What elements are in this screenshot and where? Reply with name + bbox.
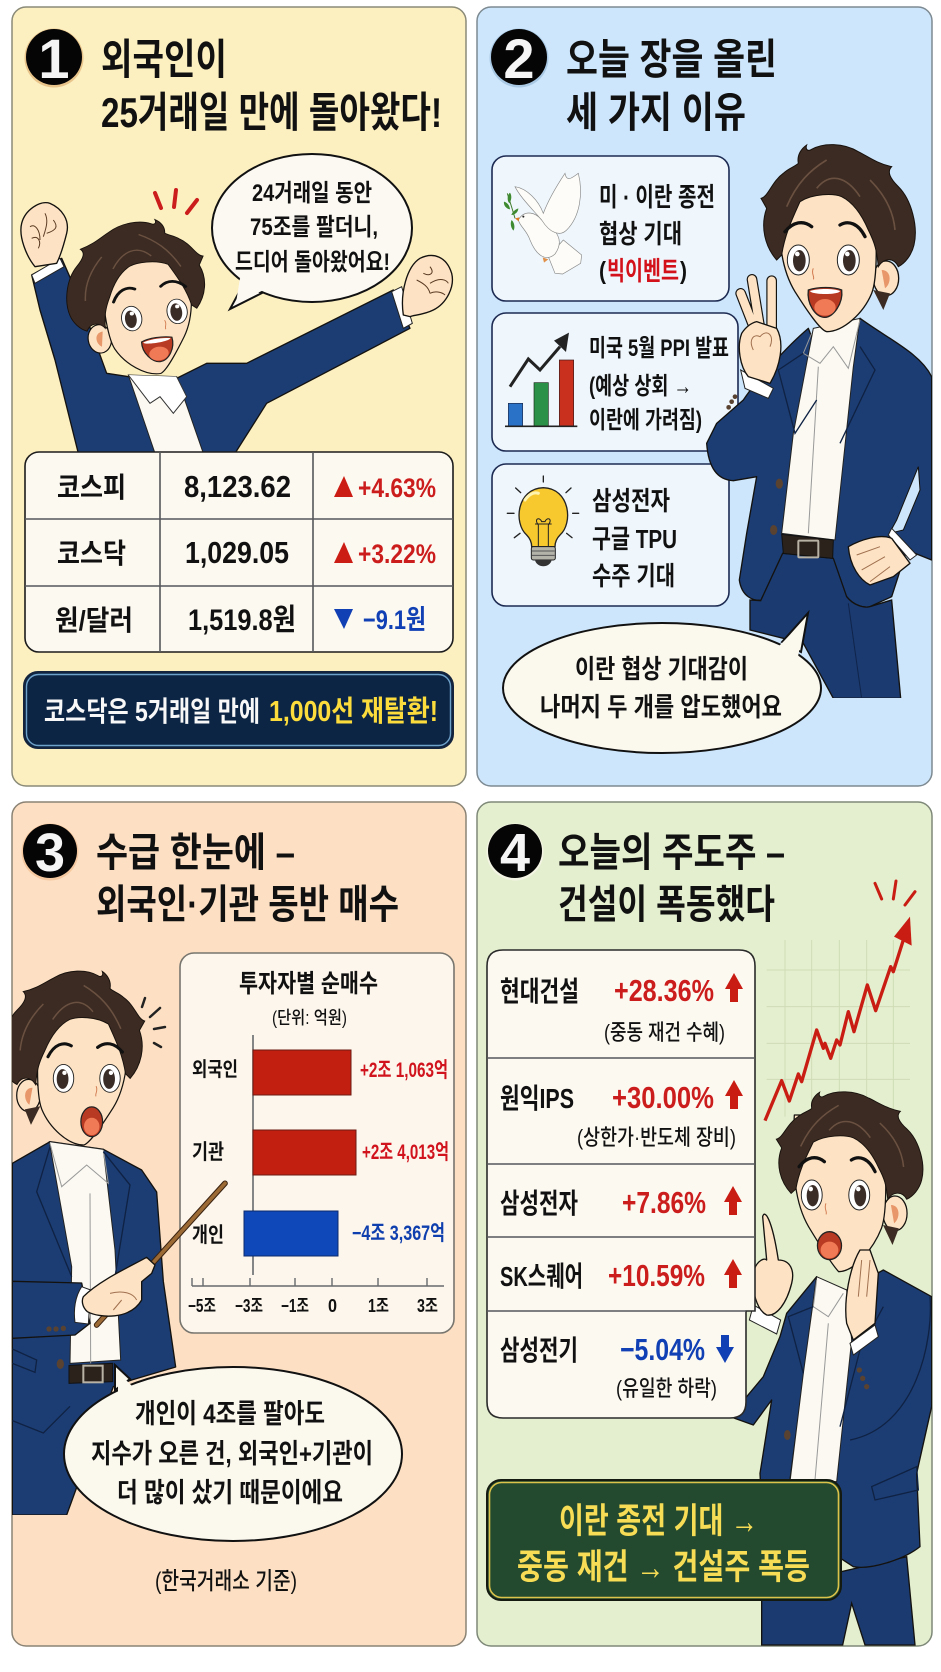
speech bubble 3: 더 많이 샀기 때문이에요 — [117, 1478, 343, 1508]
row: KOSDAQ: 코스닥 — [57, 538, 126, 569]
banner: construction rally — [487, 1480, 841, 1600]
reason box 2: (예상 상회 → — [589, 373, 692, 400]
bar: institutions: +2조 4,013억 — [362, 1141, 449, 1164]
banner: KOSDAQ 1000: 1,000선 재탈환! — [269, 695, 438, 728]
speech bubble 1: 드디어 돌아왔어요! — [235, 249, 390, 276]
title 1: 외국인이 — [101, 36, 227, 83]
reason box 1: 협상 기대 — [599, 219, 682, 249]
title 2 — [566, 36, 777, 136]
speech bubble 3 — [64, 1365, 402, 1541]
badge 1: 1 — [38, 27, 70, 90]
title 3: 수급 한눈에 – — [96, 831, 295, 875]
badge 4 — [486, 823, 544, 883]
icon: bar chart with arrow — [505, 333, 577, 426]
badge 2: 2 — [503, 27, 535, 90]
character 2: man showing three fingers — [707, 145, 932, 698]
row: SK Square — [500, 1258, 742, 1293]
x axis: 3조 — [417, 1296, 438, 1316]
reason box 1 — [492, 156, 729, 301]
banner: KOSDAQ 1000: 코스닥은 5거래일 만에 — [44, 696, 260, 727]
title 4: 오늘의 주도주 – — [558, 831, 785, 875]
badge 4: 4 — [500, 823, 530, 883]
row: KOSPI: 8,123.62 — [184, 469, 291, 504]
reason box 3 — [492, 464, 729, 606]
row: Samsung Electro-Mechanics: −5.04% — [620, 1332, 705, 1367]
speech bubble 1 — [212, 154, 412, 309]
badge 2 — [490, 27, 548, 90]
title 1: 25거래일 만에 돌아왔다! — [101, 89, 442, 136]
source note: (한국거래소 기준) — [155, 1568, 297, 1595]
label: individuals: 개인 — [192, 1224, 224, 1247]
row: KRW/USD: −9.1원 — [363, 605, 426, 635]
badge 3: 3 — [35, 823, 65, 883]
title 3: 외국인·기관 동반 매수 — [96, 883, 399, 927]
bar: individuals: −4조 3,367억 — [352, 1222, 445, 1245]
row: KRW/USD — [55, 604, 426, 637]
bar: foreigners — [192, 1050, 448, 1095]
speech bubble 2 — [503, 613, 821, 753]
title 4 — [558, 831, 785, 927]
row: Wonik IPS — [500, 1080, 743, 1150]
title 2: 오늘 장을 올린 — [566, 36, 777, 83]
row: Wonik IPS: 원익IPS — [500, 1083, 574, 1114]
row: Samsung Electronics: +7.86% — [622, 1185, 706, 1220]
row: KRW/USD: 1,519.8원 — [188, 604, 296, 637]
x axis: −3조 — [235, 1296, 263, 1316]
banner: construction rally: 이란 종전 기대 → — [559, 1502, 758, 1541]
row: KOSDAQ — [57, 535, 436, 570]
title 1 — [101, 36, 442, 136]
row: Samsung Electronics: 삼성전자 — [500, 1188, 578, 1219]
speech bubble 2: 이란 협상 기대감이 — [575, 654, 748, 684]
badge 3 — [22, 823, 78, 883]
surprise marks 3 — [142, 998, 165, 1047]
badge 1 — [24, 27, 84, 90]
reason box 3: 구글 TPU — [592, 524, 677, 554]
row: Samsung Electro-Mechanics: 삼성전기 — [500, 1335, 578, 1366]
x axis — [188, 1278, 444, 1316]
panel 1: foreigners return — [12, 7, 466, 786]
row: SK Square: +10.59% — [608, 1258, 705, 1293]
row: Hyundai E&C: 현대건설 — [500, 976, 579, 1007]
x axis: −1조 — [281, 1296, 309, 1316]
bar: foreigners: +2조 1,063억 — [360, 1059, 448, 1082]
row: KOSDAQ: 1,029.05 — [185, 535, 289, 570]
title 2: 세 가지 이유 — [566, 89, 746, 136]
banner: KOSDAQ 1000 — [24, 672, 453, 748]
bar: foreigners: 외국인 — [192, 1058, 238, 1081]
row: KRW/USD: 원/달러 — [55, 605, 133, 636]
reason box 2: 이란에 가려짐) — [589, 407, 702, 434]
chart card: net buying by investor: 투자자별 순매수 — [239, 970, 378, 998]
row: SK Square: SK스퀘어 — [500, 1261, 583, 1292]
bar: institutions — [192, 1130, 449, 1175]
banner: construction rally: 중동 재건 → 건설주 폭등 — [517, 1548, 810, 1587]
stock table — [487, 950, 755, 1418]
speech bubble 3: 지수가 오른 건, 외국인+기관이 — [91, 1439, 373, 1469]
reason box 1: 빅이벤트 — [607, 256, 679, 286]
row: Samsung Electro-Mechanics: (유일한 하락) — [616, 1376, 717, 1401]
icon: light bulb — [507, 476, 579, 566]
chart card: net buying by investor — [180, 953, 454, 1333]
reason box 2 — [492, 313, 738, 451]
market table — [25, 452, 453, 652]
excitement marks 1 — [155, 190, 197, 213]
speech bubble 2: 나머지 두 개를 압도했어요 — [540, 692, 782, 722]
character 3: man with pointer — [1, 971, 225, 1515]
row: Wonik IPS: (상한가·반도체 장비) — [577, 1125, 736, 1150]
row: Hyundai E&C: +28.36% — [614, 973, 714, 1008]
rising line chart — [765, 881, 915, 1121]
reason box 3: 수주 기대 — [592, 561, 675, 591]
reason box 3: 삼성전자 — [592, 486, 670, 516]
bar: institutions: 기관 — [192, 1141, 224, 1164]
icon: dove — [504, 173, 582, 274]
row: KOSPI: +4.63% — [358, 473, 436, 503]
row: Hyundai E&C — [500, 973, 743, 1045]
x axis: 1조 — [368, 1296, 389, 1316]
speech bubble 1: 75조를 팔더니, — [250, 214, 378, 241]
row: Wonik IPS: +30.00% — [612, 1080, 714, 1115]
panel 3: supply and demand — [1, 802, 466, 1646]
row: KOSDAQ: +3.22% — [358, 539, 436, 569]
speech bubble 3: 개인이 4조를 팔아도 — [135, 1399, 325, 1429]
panel 2: three reasons — [477, 7, 932, 786]
reason box 2: 미국 5월 PPI 발표 — [589, 335, 729, 362]
row: KOSPI: 코스피 — [57, 472, 126, 503]
reason box 1: ) — [680, 257, 687, 285]
x axis: −5조 — [188, 1296, 216, 1316]
row: Hyundai E&C: (중동 재건 수혜) — [604, 1020, 725, 1045]
x axis: 0 — [328, 1296, 337, 1316]
reason box 1: 미 · 이란 종전 — [599, 182, 715, 212]
chart card: net buying by investor: (단위: 억원) — [272, 1008, 347, 1028]
character 1: cheering man — [21, 203, 452, 453]
title 4: 건설이 폭동했다 — [558, 883, 775, 927]
bar: individuals — [244, 1211, 445, 1256]
reason box 1: ( — [599, 257, 607, 285]
panel 4: leading stocks — [477, 802, 932, 1646]
speech bubble 1: 24거래일 동안 — [252, 180, 372, 207]
row: Samsung Electronics — [500, 1185, 742, 1220]
title 3 — [96, 831, 399, 927]
character 4: man pointing up — [730, 1092, 932, 1645]
row: Samsung Electro-Mechanics — [500, 1332, 734, 1401]
row: KOSPI — [57, 469, 436, 504]
